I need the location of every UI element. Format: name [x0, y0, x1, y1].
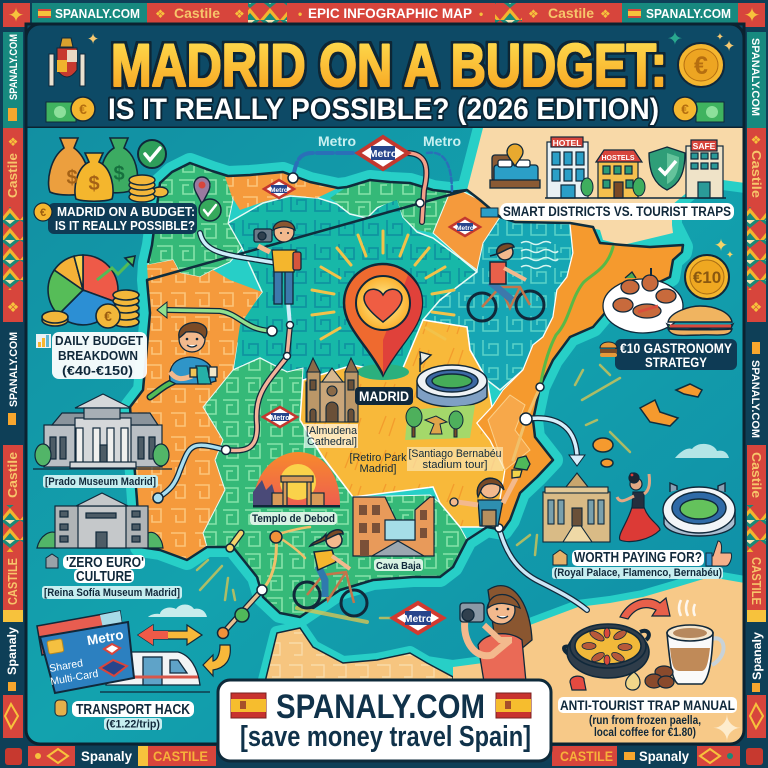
left border band: Spanaly: [5, 627, 19, 675]
icon: metro train: [100, 652, 210, 692]
label: daily budget breakdown: BREAKDOWN: [58, 348, 138, 363]
sparkles: [87, 29, 735, 55]
decoration: big sparkle: ✦: [712, 708, 742, 749]
icon: shield: [649, 147, 685, 190]
callout: madrid on a budget: €: [40, 207, 46, 219]
label: retiro park: [350, 452, 407, 475]
panel: map: [26, 128, 745, 745]
icon: metro badge north: [264, 180, 294, 198]
label: daily budget breakdown: DAILY BUDGET: [55, 333, 143, 348]
decoration: waves: [521, 242, 558, 268]
route: east green: [540, 247, 613, 387]
right border band: SPANALY.COM: [749, 38, 761, 116]
label: gastronomy strategy: STRATEGY: [645, 354, 708, 370]
right border band: ❖: [750, 299, 762, 315]
icon: metro badge bottom: [393, 603, 443, 633]
label: run from frozen paella: (run from frozen paella,: [589, 715, 701, 727]
left border band: SPANALY.COM: [8, 332, 20, 407]
top border band: ❖: [234, 7, 245, 21]
bottom border band: CASTILE: [153, 748, 208, 764]
route: west blue: [158, 445, 226, 498]
sand land halo: [258, 572, 742, 678]
icon: left cash and coin: [46, 97, 95, 122]
icon: safe building: [686, 140, 723, 198]
icon: steam: [679, 600, 695, 616]
label: retiro park: Madrid]: [360, 463, 396, 475]
top border band: EPIC INFOGRAPHIC MAP: [308, 6, 472, 21]
icon: almudena cathedral: [306, 358, 358, 422]
chart: budget pie: €: [104, 308, 112, 324]
icon: money bags: [49, 138, 138, 201]
icon: templo de debod sunset: [253, 452, 340, 508]
right border band: [747, 32, 766, 738]
region: north central green: [330, 180, 450, 233]
region: east orange coast: [477, 223, 683, 530]
icon: reina sofia museum: [37, 493, 163, 548]
label: worth paying for: WORTH PAYING FOR?: [574, 550, 702, 566]
label: retiro park: [Retiro Park: [350, 452, 407, 464]
icon: trees: [581, 178, 645, 196]
label: smart districts: SMART DISTRICTS VS. TOURIST TRAPS: [503, 204, 731, 219]
route: north-west blue: [200, 233, 277, 263]
top border band: ✦: [744, 5, 760, 27]
left border band: ❖: [7, 299, 19, 315]
decoration: cloud: [148, 604, 207, 617]
top border band: [3, 3, 765, 27]
label: transport hack: [55, 700, 194, 718]
route: central salmon: [226, 325, 290, 451]
bottom border band: CASTILE: [560, 748, 613, 764]
right border band: Castile: [749, 150, 764, 198]
label: prado museum: [Prado Museum Madrid]: [45, 476, 156, 488]
region: portugal orange: [130, 260, 262, 560]
icon: tapas plate: [603, 268, 683, 333]
route: south yellow: [264, 544, 278, 587]
left border band: Castile: [5, 452, 20, 498]
right border band: SPANALY.COM: [749, 360, 761, 438]
icon: metro multi-card: [37, 611, 134, 693]
left border band: CASTILE: [5, 558, 20, 605]
label: cava baja: Cava Baja: [376, 560, 421, 572]
label: gastronomy strategy: €10 GASTRONOMY: [620, 340, 733, 356]
icon: euro coin: €: [694, 52, 708, 80]
icon: euro 10 coin: [685, 255, 729, 299]
figure: woman raising arms: [450, 456, 530, 526]
left border band: ❖: [8, 135, 18, 149]
region: north orange: [225, 172, 338, 210]
figure: flamenco dancer: [617, 473, 660, 542]
icon: metro badge north: Metro: [270, 187, 288, 194]
figure: hiker with camera: [254, 221, 301, 304]
region: north-east orange: [433, 190, 500, 270]
sparkles: ✦: [723, 38, 735, 55]
top border band: Castile: [548, 5, 594, 21]
region: central south sand: [265, 628, 453, 682]
icon: yellow curved arrow: [203, 645, 230, 676]
label: almudena cathedral: [304, 424, 358, 448]
route: green arrow: [167, 310, 272, 331]
icon: coffee beans and garlic: [570, 666, 674, 690]
region: north-west green: [148, 163, 242, 277]
sparkles: ✦: [667, 29, 683, 50]
icon: safe building: SAFE: [693, 141, 716, 151]
arrow: red curved: [620, 598, 670, 619]
label: metro left: Metro: [318, 133, 356, 149]
label: run from frozen paella: [589, 715, 701, 739]
icon: hostel building: HOSTELS: [601, 155, 635, 162]
icon: map pin with heart: [312, 231, 454, 380]
icon: coffee cup: [667, 625, 724, 684]
arrow: red-yellow double: [138, 625, 202, 645]
icon: retiro park trees: [405, 405, 475, 440]
icon: metro badge north-east: Metro: [456, 225, 474, 232]
label: madrid: MADRID: [359, 389, 409, 404]
sparkles east: [714, 236, 734, 261]
region: central yellow: [300, 320, 505, 527]
top border band: •: [479, 7, 483, 21]
icon: hotel building: [547, 137, 588, 198]
left border band: [3, 32, 23, 738]
right border band: Castile: [749, 452, 764, 498]
label: transport hack: TRANSPORT HACK: [76, 702, 190, 718]
icon: stadium right: [663, 483, 735, 536]
icon: sandwich: [667, 306, 733, 335]
icon: metro multi-card: Shared: [48, 657, 84, 675]
top border band: Castile: [174, 5, 220, 21]
label: almudena cathedral: [Almudena: [306, 425, 358, 437]
icon: hostel building: [596, 150, 642, 198]
sunburst rays: [312, 231, 454, 339]
hotels group: [490, 137, 726, 198]
top border band: •: [298, 7, 302, 21]
figure: man with drink: [170, 323, 217, 384]
icon: money bags: $: [88, 173, 100, 195]
icon: euro coin: [678, 43, 724, 87]
label: zero euro culture: CULTURE: [76, 569, 132, 585]
left border band: SPANALY.COM: [8, 34, 20, 100]
region: south-east sand: [453, 577, 745, 745]
sparkles: ✦: [87, 31, 99, 48]
routes: [150, 153, 613, 633]
route: east blue arrow: [526, 418, 577, 455]
sparkles east: ✦: [726, 250, 734, 261]
icon: metro badge central: Metro: [270, 415, 290, 422]
label: anti-tourist trap manual: ANTI-TOURIST TRAP MANUAL: [560, 697, 735, 713]
figure: cyclist north-east: [468, 243, 544, 321]
label: metro right: Metro: [423, 133, 461, 149]
region: south-central green: [203, 358, 467, 617]
top border band: SPANALY.COM: [646, 6, 731, 21]
region: east teal: [423, 217, 573, 390]
banner: spanaly.com: [218, 680, 551, 761]
icon: royal palace: [543, 473, 610, 542]
region: teal interior: [228, 196, 477, 382]
icon: prado museum: [33, 394, 172, 469]
icon: paella pan: [564, 624, 649, 678]
top border band: ❖: [600, 7, 611, 21]
bottom border band: [5, 746, 763, 766]
top border band: ❖: [528, 7, 539, 21]
callout: madrid on a budget: [34, 203, 197, 234]
chart: budget pie: [42, 255, 139, 328]
figure: girl on bicycle: [294, 530, 367, 616]
label: santiago bernabeu: stadium tour]: [422, 459, 488, 471]
label: run from frozen paella: local coffee for €1.80): [594, 727, 696, 739]
callout: madrid on a budget: MADRID ON A BUDGET:: [57, 204, 195, 219]
label: daily budget breakdown: [36, 332, 147, 379]
sparkles: ✦: [716, 32, 724, 43]
icon: metro multi-card: Multi-Card: [49, 668, 99, 688]
label: reina sofia museum: [Reina Sofía Museum Madrid]: [44, 587, 180, 599]
banner title: SPANALY.COM: [276, 688, 485, 726]
label: transport price: (€1.22/trip): [106, 718, 160, 730]
icon: metro badge central: [263, 407, 297, 427]
bottom border band: Spanaly: [81, 748, 132, 764]
label: zero euro culture: [46, 554, 145, 585]
icon: right cash and coin: [673, 97, 724, 122]
callout: madrid on a budget: IS IT REALLY POSSIBLE?: [55, 218, 195, 233]
sea dashes: [197, 365, 630, 622]
label: worth paying for: [553, 541, 732, 566]
icon: euro 10 coin: €10: [693, 268, 721, 287]
top border band: SPANALY.COM: [55, 6, 140, 21]
right border band: Spanaly: [750, 632, 764, 680]
label: gastronomy strategy: [600, 339, 737, 370]
label: almudena cathedral: Cathedral]: [307, 436, 357, 448]
sparkles east: ✦: [714, 236, 728, 255]
icon: metro badge north-east: [450, 218, 480, 236]
banner subtitle: [save money travel Spain]: [240, 721, 531, 753]
icon: metro multi-card: Metro: [86, 627, 125, 648]
label: daily budget breakdown: (€40-€150): [62, 363, 133, 378]
label: santiago bernabeu: [407, 447, 503, 471]
icon: spanish flag left: [231, 693, 266, 718]
icon: coin stack: [129, 175, 168, 202]
icon: location pin and check: [194, 177, 221, 221]
figure: woman photographer: [460, 586, 532, 682]
icon: bed: [490, 144, 540, 188]
region: north-east beige: [467, 128, 745, 245]
islands: [593, 384, 702, 467]
panel: header: [26, 24, 744, 128]
route nodes: [153, 173, 544, 638]
coast outline: [130, 163, 683, 617]
label: templo de debod: Templo de Debod: [252, 513, 335, 525]
subtitle: IS IT REALLY POSSIBLE? (2026 EDITION): [108, 93, 659, 126]
icon: hotel building: HOTEL: [553, 138, 581, 148]
icon: metro badge top: Metro: [369, 148, 397, 160]
top border band: ✦: [8, 5, 24, 27]
icon: spanish flag right: [496, 693, 531, 718]
icon: metro badge bottom: Metro: [404, 613, 432, 625]
icon: right cash and coin: €: [681, 101, 689, 117]
right border band: CASTILE: [749, 557, 764, 605]
route: top metro: [292, 151, 358, 173]
icon: bernabeu stadium: [417, 352, 487, 407]
sea halo: [130, 128, 745, 617]
bottom border band: Spanaly: [639, 748, 689, 764]
label: royal palace flamenco bernabeu: (Royal Palace, Flamenco, Bernabéu): [554, 567, 722, 579]
icon: metro badge top: [358, 137, 408, 169]
icon: money bags: $: [113, 163, 125, 185]
icon: check badge: [138, 140, 166, 168]
label: santiago bernabeu: [Santiago Bernabéu: [408, 448, 502, 460]
left border band: Castile: [5, 153, 20, 198]
icon: left cash and coin: €: [79, 101, 87, 117]
icon: cava baja street: [353, 497, 434, 556]
top border band: ❖: [155, 7, 166, 21]
route: south-east blue: [499, 528, 587, 610]
icon: coat of arms: [49, 38, 85, 86]
decoration: cloud right: [675, 444, 729, 458]
label: zero euro culture: 'ZERO EURO': [66, 555, 144, 571]
right border band: ❖: [751, 133, 761, 147]
icon: money bags: $: [66, 167, 78, 189]
